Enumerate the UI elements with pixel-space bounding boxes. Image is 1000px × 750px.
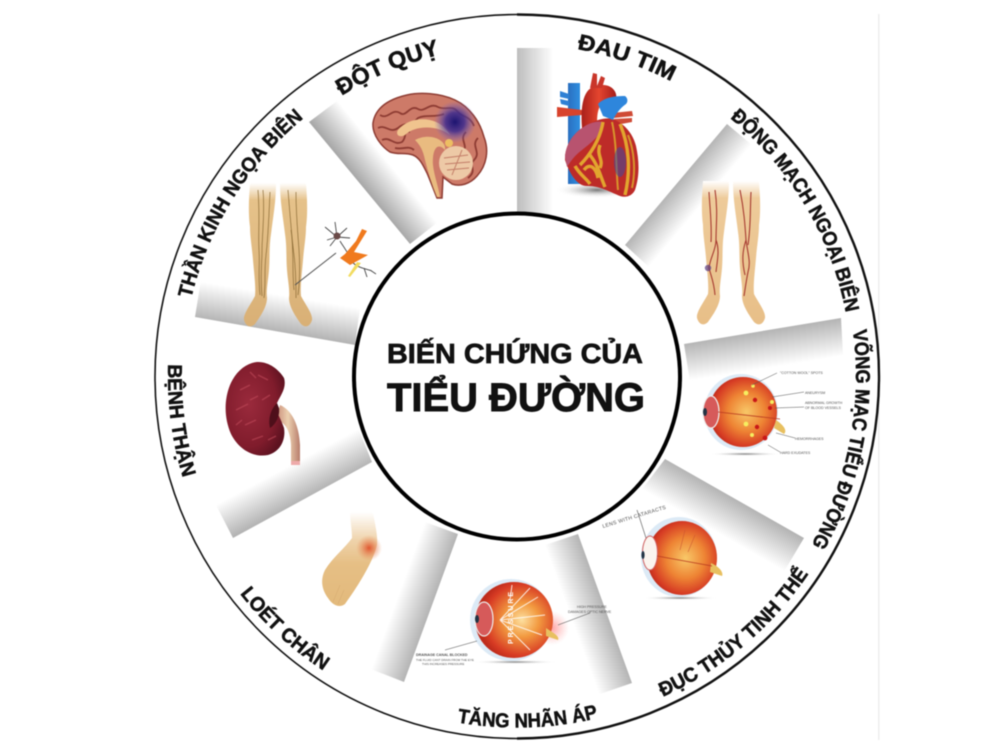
outer ring	[155, 14, 879, 738]
icon: legs with peripheral arteries	[697, 181, 765, 324]
faint edge line of source image	[878, 14, 880, 740]
wedge band: stroke	[309, 101, 438, 244]
lightning bolt	[340, 229, 368, 265]
wedge band: retinopathy	[684, 318, 843, 382]
retinopathy small labels: HEMORRHAGES	[795, 437, 824, 441]
label: kidney disease: BỆNH THẬN	[164, 364, 197, 478]
center circle with title	[354, 214, 680, 540]
icon: foot with ulcer	[322, 512, 382, 606]
retinopathy small labels	[780, 371, 843, 455]
wedge band: cataract	[640, 459, 804, 575]
label: foot ulcer: LOÉT CHÂN	[240, 585, 331, 671]
label: glaucoma: TĂNG NHÃN ÁP	[458, 702, 597, 729]
wedge band: foot ulcer	[368, 522, 458, 682]
glaucoma small labels: DAMAGES OPTIC NERVE	[568, 610, 612, 614]
glaucoma pressure word: PRESSURE	[508, 592, 515, 644]
cataract small label: LENS WITH CATARACTS	[602, 505, 667, 530]
glaucoma small labels: THIS INCREASES PRESSURE	[422, 662, 464, 666]
wedge band: neuropathy	[195, 280, 360, 345]
retinopathy small labels: OF BLOOD VESSELS	[805, 406, 842, 410]
retinopathy small labels: "COTTON WOOL" SPOTS	[780, 371, 823, 375]
glaucoma small labels: DRAINAGE CANAL BLOCKED	[416, 653, 468, 657]
label: stroke: ĐỘT QUỴ	[334, 38, 436, 96]
label: peripheral neuropathy: THẦN KINH NGỌA BIÊN	[176, 108, 304, 296]
icon: eye with glaucoma	[416, 579, 612, 666]
icon: heart	[555, 73, 639, 198]
wedge band: heart	[517, 48, 553, 215]
neuron	[325, 222, 376, 277]
glaucoma small labels: THE FLUID CANT DRAIN FROM THE EYE	[416, 658, 474, 662]
label: peripheral artery disease: ĐỘNG MẠCH NGOẠI BIÊN	[730, 107, 860, 312]
wedge band: glaucoma	[545, 534, 632, 695]
glaucoma small labels: HIGH PRESSURE	[577, 605, 607, 609]
nerve pointer line	[295, 253, 336, 285]
icon: brain with stroke	[373, 93, 487, 198]
retinopathy small labels: ANEURYSM	[805, 391, 825, 395]
retinopathy small labels: HARD EXUDATES	[780, 451, 811, 455]
wedge band: peripheral artery	[625, 124, 752, 268]
label: heart attack: ĐAU TIM	[578, 34, 678, 82]
wedge band: kidney	[216, 428, 372, 538]
icon: legs with nerves and neuron	[244, 183, 376, 326]
retinopathy small labels: ABNORMAL GROWTH	[805, 401, 843, 405]
icon: eye with diabetic retinopathy	[703, 371, 843, 456]
label: diabetic retinopathy: VÕNG MẠC TIỂU ĐƯỜNG	[812, 328, 874, 550]
glaucoma small labels	[416, 605, 612, 666]
label: cataract: ĐỤC THỦY TINH THỂ	[657, 564, 809, 698]
icon: eye with cataract	[602, 505, 722, 600]
title line 2: TIỂU ĐƯỜNG	[387, 373, 645, 420]
title line 1: BIẾN CHỨNG CỦA	[387, 337, 643, 369]
icon: kidney	[226, 362, 300, 465]
